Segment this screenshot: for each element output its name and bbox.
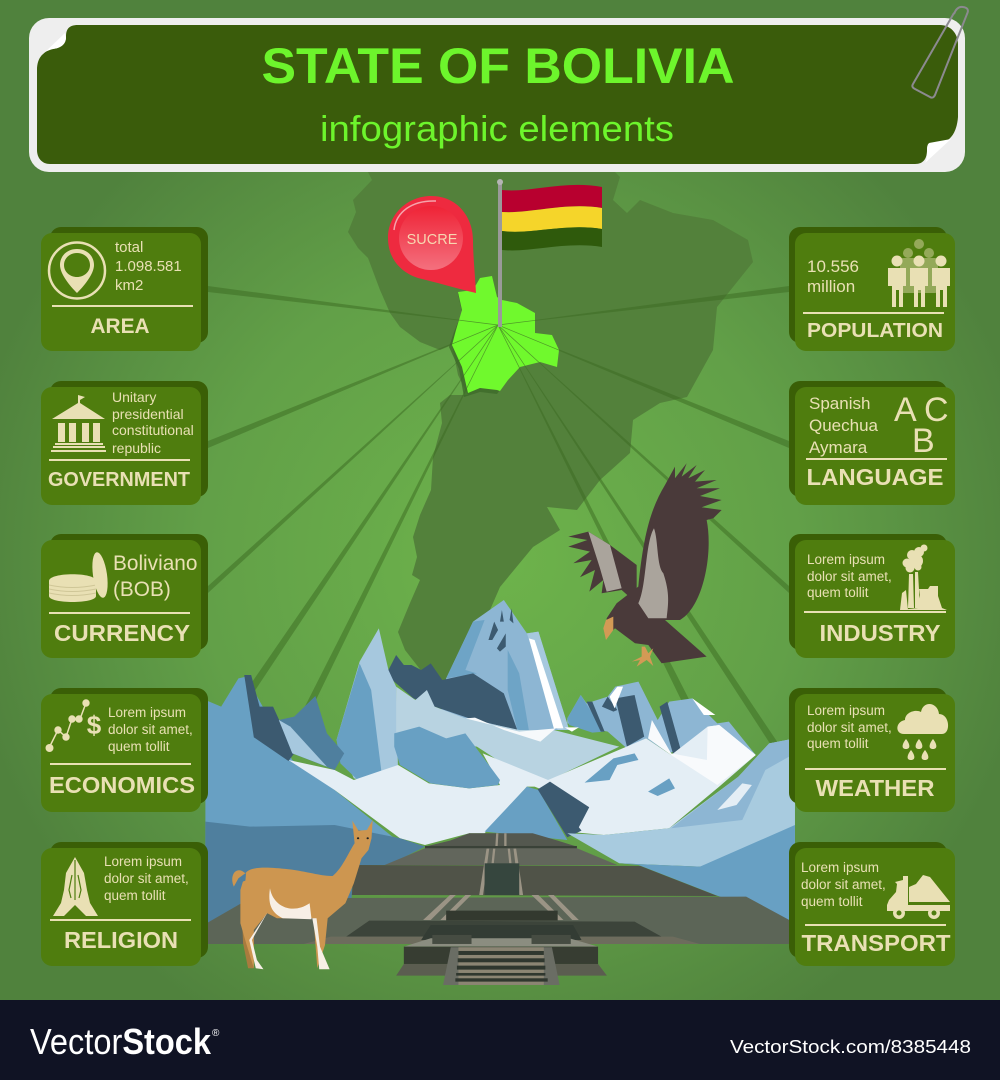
panel: government: GOVERNMENT [48, 469, 190, 491]
panel: population: million [807, 277, 855, 296]
panel: area: AREA [90, 315, 150, 338]
panel: transport: dolor sit amet, [801, 877, 886, 892]
panel: currency: (BOB) [113, 578, 171, 601]
panel: economics: quem tollit [108, 739, 170, 754]
icon: condor [568, 463, 722, 667]
icon: growth chart and dollar [46, 699, 102, 752]
panel: population: 10.556 [807, 257, 859, 276]
icon: crowd of people [888, 239, 950, 307]
panel: area [41, 227, 208, 351]
panel: government: presidential [112, 406, 184, 422]
panel: language: Spanish [809, 394, 870, 413]
panel: transport [789, 842, 955, 966]
icon: guanaco llama [232, 820, 373, 969]
footer watermark band: ® [212, 1028, 220, 1039]
panel: industry: INDUSTRY [820, 620, 940, 646]
panel: population [789, 227, 955, 351]
panel: language: Quechua [809, 416, 879, 435]
icon: location pin [49, 242, 105, 298]
icon: letters ABC: C [924, 391, 949, 429]
map: South America silhouette [348, 172, 753, 682]
icon: rain cloud [897, 704, 948, 760]
panel: weather: WEATHER [816, 775, 935, 801]
panel: industry: dolor sit amet, [807, 569, 892, 584]
map pin: Sucre: SUCRE [407, 232, 458, 248]
panel: government: Unitary [112, 389, 156, 405]
panel: weather: dolor sit amet, [807, 720, 892, 735]
panel: religion: Lorem ipsum [104, 854, 182, 869]
panel: currency: Boliviano [113, 552, 197, 575]
panel: area: total [115, 239, 143, 256]
panel: weather: Lorem ipsum [807, 703, 885, 718]
panel: industry [789, 534, 955, 658]
subtitle text: infographic elements [320, 108, 674, 149]
panel: industry: Lorem ipsum [807, 552, 885, 567]
mountains and pyramid scene [205, 600, 795, 985]
icon: letters ABC: B [912, 422, 935, 460]
panel: economics [41, 688, 208, 812]
panel: transport: TRANSPORT [802, 930, 950, 956]
panel: weather [789, 688, 955, 812]
map pin: Sucre [388, 196, 476, 293]
panel: government [41, 381, 208, 505]
panel: industry: quem tollit [807, 585, 869, 600]
icon: coins [49, 551, 110, 602]
panel: religion: dolor sit amet, [104, 871, 189, 886]
icon: growth chart and dollar: $ [87, 710, 102, 740]
panel: weather: quem tollit [807, 736, 869, 751]
flag of Bolivia [497, 179, 602, 327]
panel: religion [41, 842, 208, 966]
radiating connector lines [208, 286, 789, 762]
icon: factory with smoke [900, 544, 947, 610]
icon: government building [51, 395, 106, 452]
panel: economics: Lorem ipsum [108, 705, 186, 720]
panel: language: Aymara [809, 438, 868, 457]
panel: religion: quem tollit [104, 888, 166, 903]
paperclip [912, 7, 968, 98]
panel: population: POPULATION [807, 320, 943, 342]
map: Bolivia shadow [449, 293, 500, 397]
panel: area: 1.098.581 [115, 258, 182, 275]
panel: language: LANGUAGE [806, 464, 944, 490]
panel: economics: ECONOMICS [49, 772, 195, 798]
panel: language [789, 381, 955, 505]
title text: STATE OF BOLIVIA [262, 38, 734, 94]
panel: government: republic [112, 440, 161, 456]
panel: area: km2 [115, 277, 143, 294]
footer watermark band: VectorStock [30, 1021, 212, 1062]
panel: religion: RELIGION [64, 927, 178, 953]
panel: transport: Lorem ipsum [801, 860, 879, 875]
panel: currency: CURRENCY [54, 620, 190, 646]
panel: currency [41, 534, 208, 658]
panel: economics: dolor sit amet, [108, 722, 193, 737]
footer watermark band: VectorStock.com/8385448 [730, 1037, 971, 1057]
icon: dump truck [887, 875, 950, 919]
panel: transport: quem tollit [801, 894, 863, 909]
icon: praying hands [53, 857, 98, 916]
map: Bolivia [452, 276, 559, 393]
panel: government: constitutional [112, 422, 194, 438]
footer watermark band [0, 1000, 1000, 1080]
title banner [29, 7, 968, 172]
icon: letters ABC: A [894, 391, 917, 429]
